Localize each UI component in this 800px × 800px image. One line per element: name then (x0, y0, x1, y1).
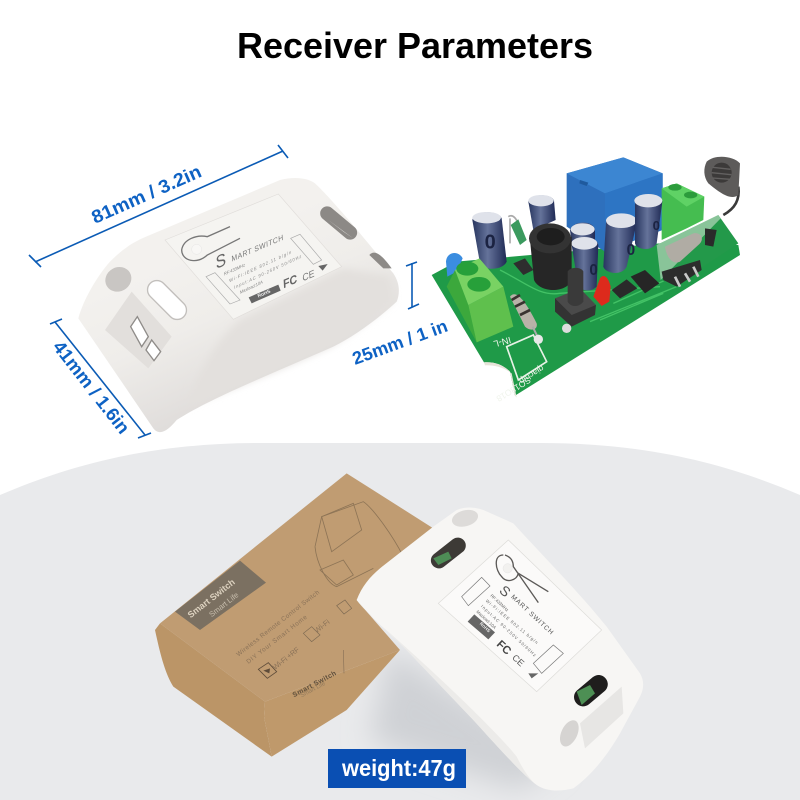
casing plate: Input:AC 90-250V 50/60Hz (480, 604, 537, 657)
silkscreen text: qiachip (517, 363, 546, 386)
capacitors: 0 (485, 231, 496, 253)
label: length: 81mm / 3.2in (88, 160, 204, 228)
kraft product box (155, 473, 433, 757)
casing plate: RoHS (479, 621, 491, 633)
casing plate: CE (510, 652, 526, 668)
silkscreen text (492, 335, 547, 404)
box print: Wi-Fi +RF (271, 645, 302, 672)
top slot (428, 534, 469, 572)
casing plate: RF:433MHz (489, 593, 510, 612)
terminal opening (105, 292, 172, 368)
dark tag: Smart Life (207, 590, 240, 619)
antenna coil (704, 157, 740, 215)
label: height: 25mm / 1 in (350, 316, 450, 369)
label plate: CE (302, 268, 315, 284)
dimension: 25mm / 1 in (406, 262, 419, 309)
box print: Wireless Remote Control Switch (235, 589, 321, 658)
dark tag: Smart Switch (186, 577, 237, 620)
push button (555, 268, 596, 333)
label plate: MART SWITCH (231, 233, 283, 264)
blue LED (446, 253, 463, 277)
relay (567, 157, 663, 252)
label plate: RoHS (257, 288, 272, 300)
label plate: FC (283, 272, 298, 291)
box print: DIY Your Smart Home (245, 614, 309, 666)
weight text: weight:47g (341, 755, 456, 781)
casing body (357, 507, 643, 791)
red LED (593, 276, 611, 306)
box front face (264, 650, 400, 757)
label plate: Input:AC 90-250V 50/60Hz (234, 253, 302, 290)
casing plate: S (496, 582, 514, 600)
casing plate: Maxload:10A (475, 609, 497, 630)
small resistor (508, 216, 527, 245)
box print: Smart Life (300, 681, 327, 699)
capacitors: 0 (653, 218, 660, 233)
label plate: Maxload:10A (240, 279, 263, 295)
badge background (328, 749, 466, 788)
box top face (160, 473, 433, 702)
casing illustration (78, 178, 399, 432)
terminal opening (580, 687, 623, 748)
weight badge (328, 749, 466, 788)
box end face (155, 623, 272, 757)
front terminal block (447, 258, 513, 342)
PCB (432, 243, 740, 396)
terminal contacts (131, 317, 161, 361)
rear green terminal (662, 183, 704, 240)
dimension: 81mm / 3.2in (29, 145, 288, 267)
capacitors: 0 (627, 242, 635, 259)
casing plate: MART SWITCH (509, 594, 554, 636)
dimension: 41mm / 1.6in (50, 319, 151, 438)
box print (235, 589, 352, 699)
label plate: S (215, 248, 226, 273)
label plate (165, 194, 342, 319)
title: Receiver Parameters (237, 25, 593, 66)
casing plate (438, 540, 602, 692)
label plate: Wi-Fi:IEEE 802.11 b/g/n (229, 249, 292, 283)
capacitors (472, 194, 662, 291)
right slot (317, 203, 360, 243)
white receiver casing with dimensions (29, 145, 450, 438)
dark tag (175, 561, 266, 630)
RF module (657, 215, 738, 287)
boxed receiver casing (357, 507, 643, 791)
label: width: 41mm / 1.6in (49, 337, 134, 438)
capacitors: 0 (589, 262, 598, 279)
box print: Wi-Fi (312, 617, 332, 635)
casing plate: FC (494, 638, 513, 657)
inductor (529, 223, 572, 290)
wire slot (144, 277, 190, 323)
box line drawing (315, 502, 403, 587)
power resistor (510, 294, 543, 344)
casing plate: Wi-Fi:IEEE 802.11 b/g/n (485, 598, 539, 645)
mounting hole (101, 262, 136, 296)
grey background panel (0, 443, 800, 800)
silkscreen text: IN-L (492, 335, 512, 349)
mounting hole (450, 507, 480, 530)
chips (513, 258, 659, 298)
box print: Smart Switch (292, 670, 338, 699)
label plate: RF:433MHz (224, 262, 246, 277)
bottom slot (570, 671, 611, 710)
circuit board photo (432, 157, 740, 404)
silkscreen text: SO18O18 (494, 375, 533, 404)
lower mounting hole (556, 717, 582, 749)
shadow below casing (370, 650, 560, 790)
